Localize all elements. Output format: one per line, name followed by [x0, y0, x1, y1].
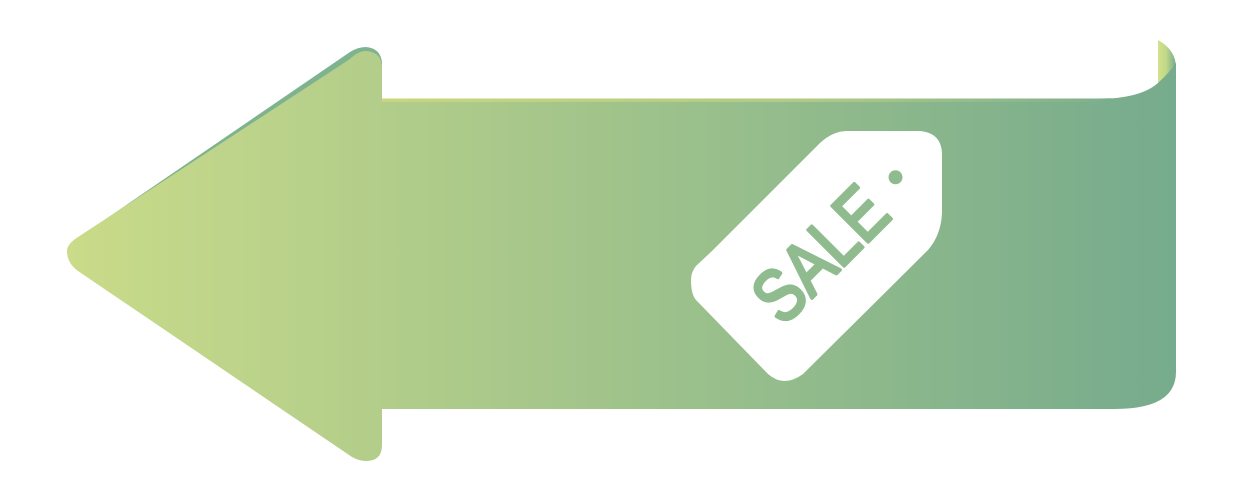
- tag shape: [691, 131, 942, 381]
- arrow head top shadow edge: [100, 47, 382, 240]
- sale tag icon: [691, 131, 942, 381]
- ribbon curl at top right: [1158, 40, 1176, 110]
- arrow body with head: [67, 51, 1176, 461]
- ribbon top edge highlight: [382, 98, 1112, 102]
- tag label: SALE: [735, 169, 904, 338]
- tag hole: [888, 170, 902, 184]
